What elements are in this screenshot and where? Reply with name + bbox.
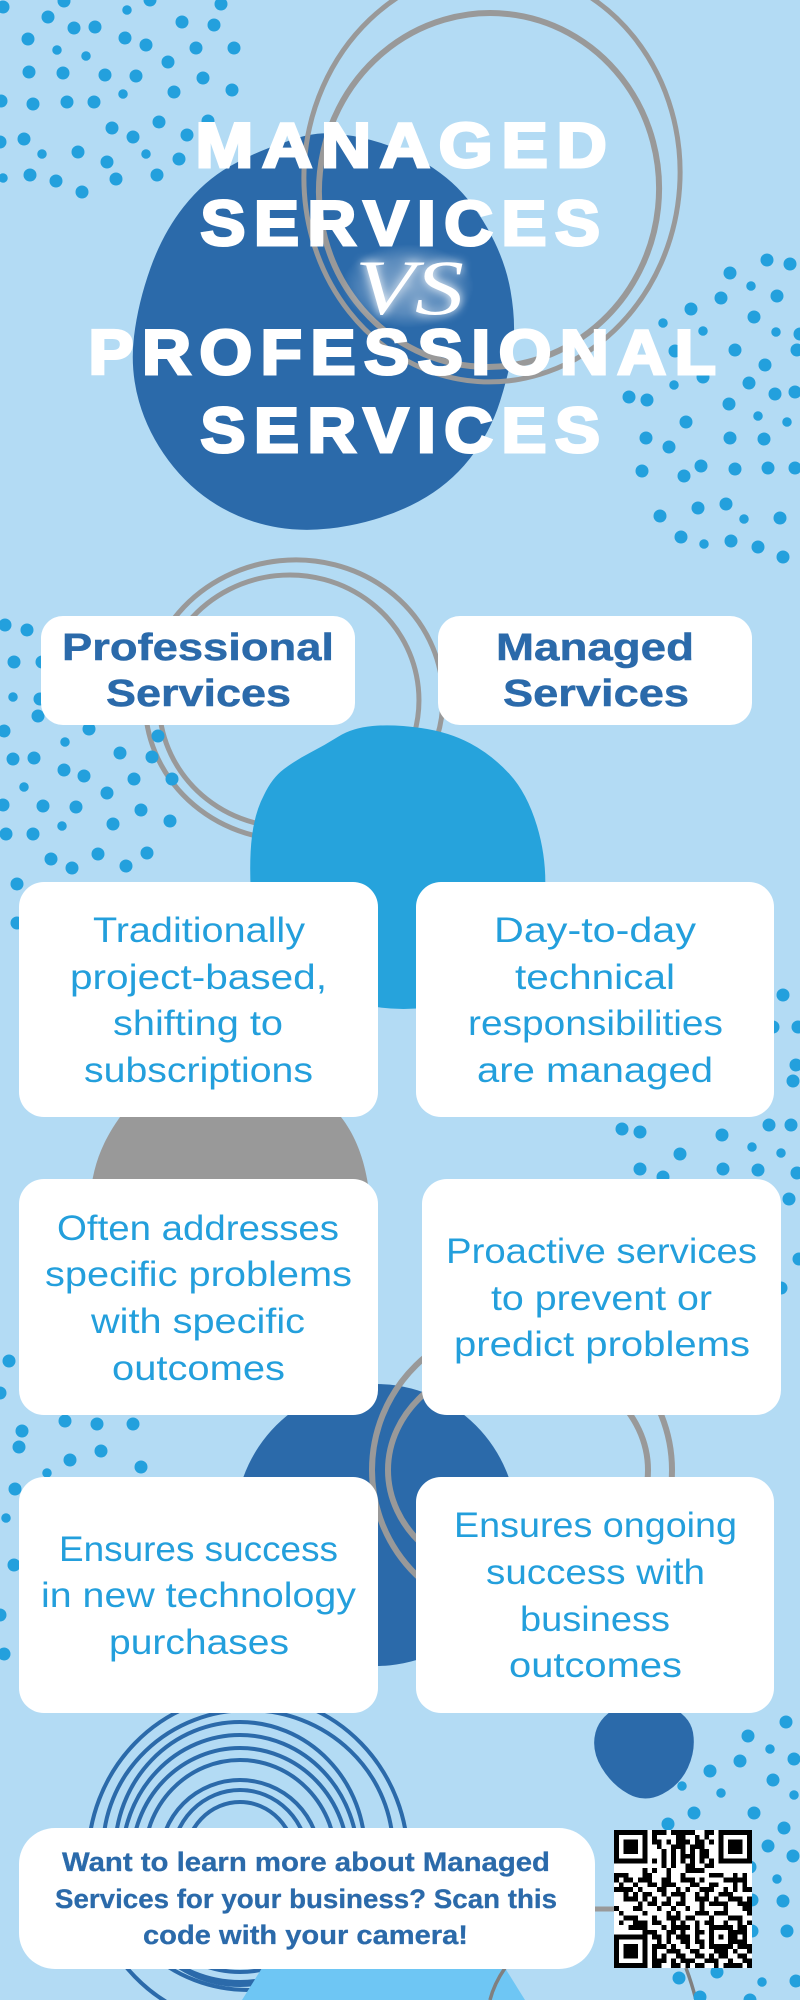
card: ensures ongoing success: success with — [486, 1553, 705, 1592]
card: often addresses: specific problems — [45, 1255, 352, 1294]
callout: scan this code — [19, 1828, 595, 1969]
decorative dark blue small blob — [594, 1700, 694, 1798]
title: SERVICES — [200, 189, 608, 259]
decorative dark blue blob behind title — [133, 133, 514, 530]
heading card: managed services: Managed — [496, 627, 694, 669]
card: day-to-day — [416, 882, 774, 1117]
heading card: professional services — [41, 616, 355, 725]
card: traditionally project-based: Traditionally — [93, 911, 306, 950]
card: proactive services: to prevent or — [491, 1279, 712, 1318]
card: traditionally project-based — [19, 882, 378, 1117]
card: ensures success: Ensures success — [59, 1530, 338, 1569]
title — [88, 111, 724, 466]
card: often addresses: with specific — [90, 1302, 305, 1341]
heading card: professional services: Services — [106, 673, 291, 715]
card: traditionally project-based: shifting to — [113, 1004, 283, 1043]
title: SERVICES — [200, 396, 608, 466]
decorative gray rings middle — [131, 545, 457, 855]
card: day-to-day: are managed — [477, 1051, 713, 1090]
card: proactive services: predict problems — [454, 1325, 750, 1364]
QR code — [614, 1830, 752, 1968]
card: proactive services — [422, 1179, 781, 1415]
card: ensures success: in new technology — [41, 1576, 357, 1615]
card: ensures ongoing success: outcomes — [509, 1646, 682, 1685]
title: MANAGED — [196, 111, 616, 181]
glowing VS: VS — [355, 244, 464, 331]
callout: scan this code: Want to learn more about Managed — [62, 1847, 550, 1877]
card: ensures ongoing success: Ensures ongoing — [454, 1506, 737, 1545]
decorative gray rings lower — [372, 1322, 672, 1618]
card: proactive services: Proactive services — [446, 1232, 757, 1271]
card: day-to-day: technical — [515, 958, 675, 997]
callout: scan this code: Services for your business? Scan this — [55, 1884, 557, 1914]
decorative gray blob — [90, 1093, 370, 1200]
title: PROFESSIONAL — [88, 318, 724, 388]
card: traditionally project-based: subscriptions — [84, 1051, 313, 1090]
card: ensures ongoing success — [416, 1477, 774, 1713]
card: often addresses: Often addresses — [57, 1209, 339, 1248]
card: day-to-day: responsibilities — [468, 1004, 723, 1043]
card: day-to-day: Day-to-day — [494, 911, 697, 950]
heading card: managed services: Services — [503, 673, 689, 715]
decorative dark blue blob lower — [235, 1384, 517, 1666]
card: traditionally project-based: project-based, — [70, 958, 327, 997]
card: often addresses — [19, 1179, 378, 1415]
heading card: managed services — [438, 616, 752, 725]
decorative gray rings top — [290, 0, 694, 395]
decorative gray ring bottom — [490, 1909, 696, 2000]
card: ensures success — [19, 1477, 378, 1713]
card: often addresses: outcomes — [112, 1349, 285, 1388]
glowing VS — [342, 244, 474, 331]
heading card: professional services: Professional — [62, 627, 334, 669]
card: ensures ongoing success: business — [520, 1600, 670, 1639]
callout: scan this code: code with your camera! — [143, 1920, 468, 1950]
decorative blue concentric rings — [88, 1695, 408, 2000]
card: ensures success: purchases — [109, 1623, 289, 1662]
decorative mid blue blob — [250, 725, 545, 1009]
decorative light blue shape bottom — [242, 1968, 525, 2000]
